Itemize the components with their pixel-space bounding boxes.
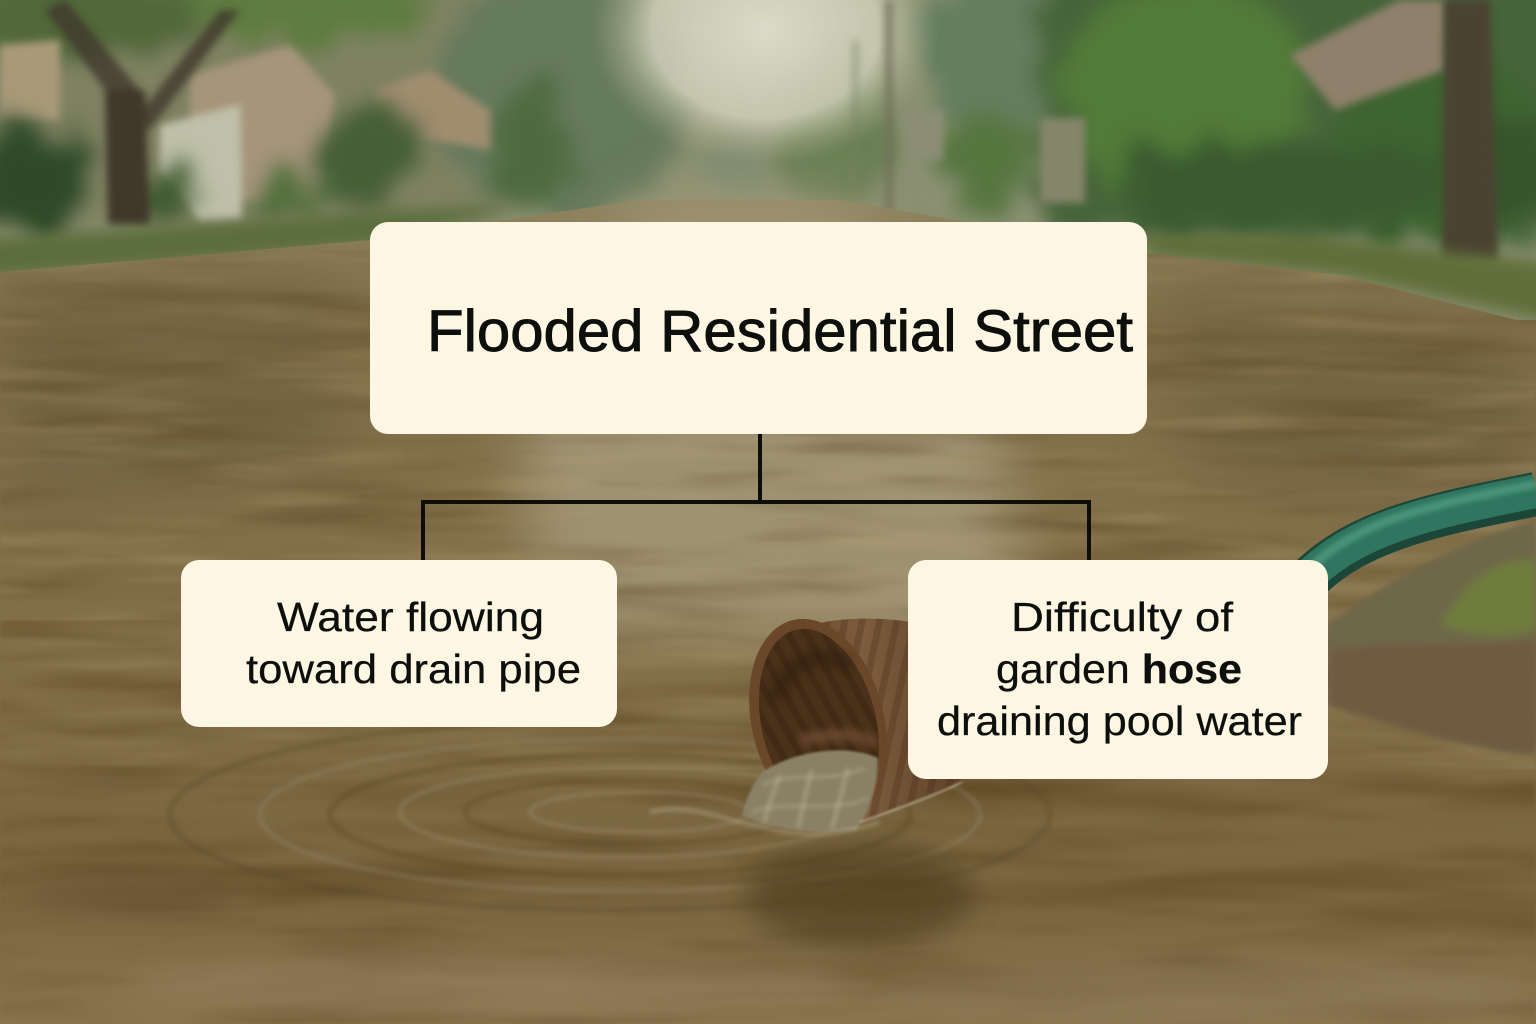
- icon: dirt bank with grass: [1328, 520, 1536, 755]
- right box: garden hose: [908, 560, 1328, 779]
- sky glow: [590, 0, 940, 165]
- right box text: garden hose: [996, 646, 1242, 692]
- splash at pipe mouth: [650, 809, 880, 834]
- left box text: [246, 594, 581, 692]
- trees in the background: [0, 0, 1536, 250]
- title box: [370, 222, 1147, 434]
- right box text: draining pool water: [937, 698, 1302, 744]
- water reflection of sky: [520, 200, 1030, 640]
- water pouring out of pipe: [742, 750, 878, 831]
- whirlpool ripples around the pipe: [170, 720, 1050, 910]
- water reflections of trees: [0, 270, 1536, 530]
- left box text: Water flowing: [277, 594, 544, 640]
- tree trunks and poles: [45, 0, 1498, 262]
- water texture: [0, 250, 1536, 1024]
- right box text: [937, 594, 1302, 744]
- left box: water flowing: [181, 560, 617, 727]
- sky and haze: [0, 0, 1536, 320]
- houses: [0, 0, 1445, 222]
- right box text: Difficulty of: [1011, 594, 1234, 640]
- connector lines: [423, 434, 1089, 560]
- title: Flooded Residential Street: [427, 299, 1133, 364]
- left box text: toward drain pipe: [246, 646, 581, 692]
- icon: rusty drain pipe: [650, 604, 962, 840]
- icon: green garden hose: [1310, 484, 1536, 578]
- grass verges: [0, 205, 1536, 332]
- dark foreground water patches: [20, 845, 1536, 1018]
- hedges and shrubs: [0, 109, 1536, 235]
